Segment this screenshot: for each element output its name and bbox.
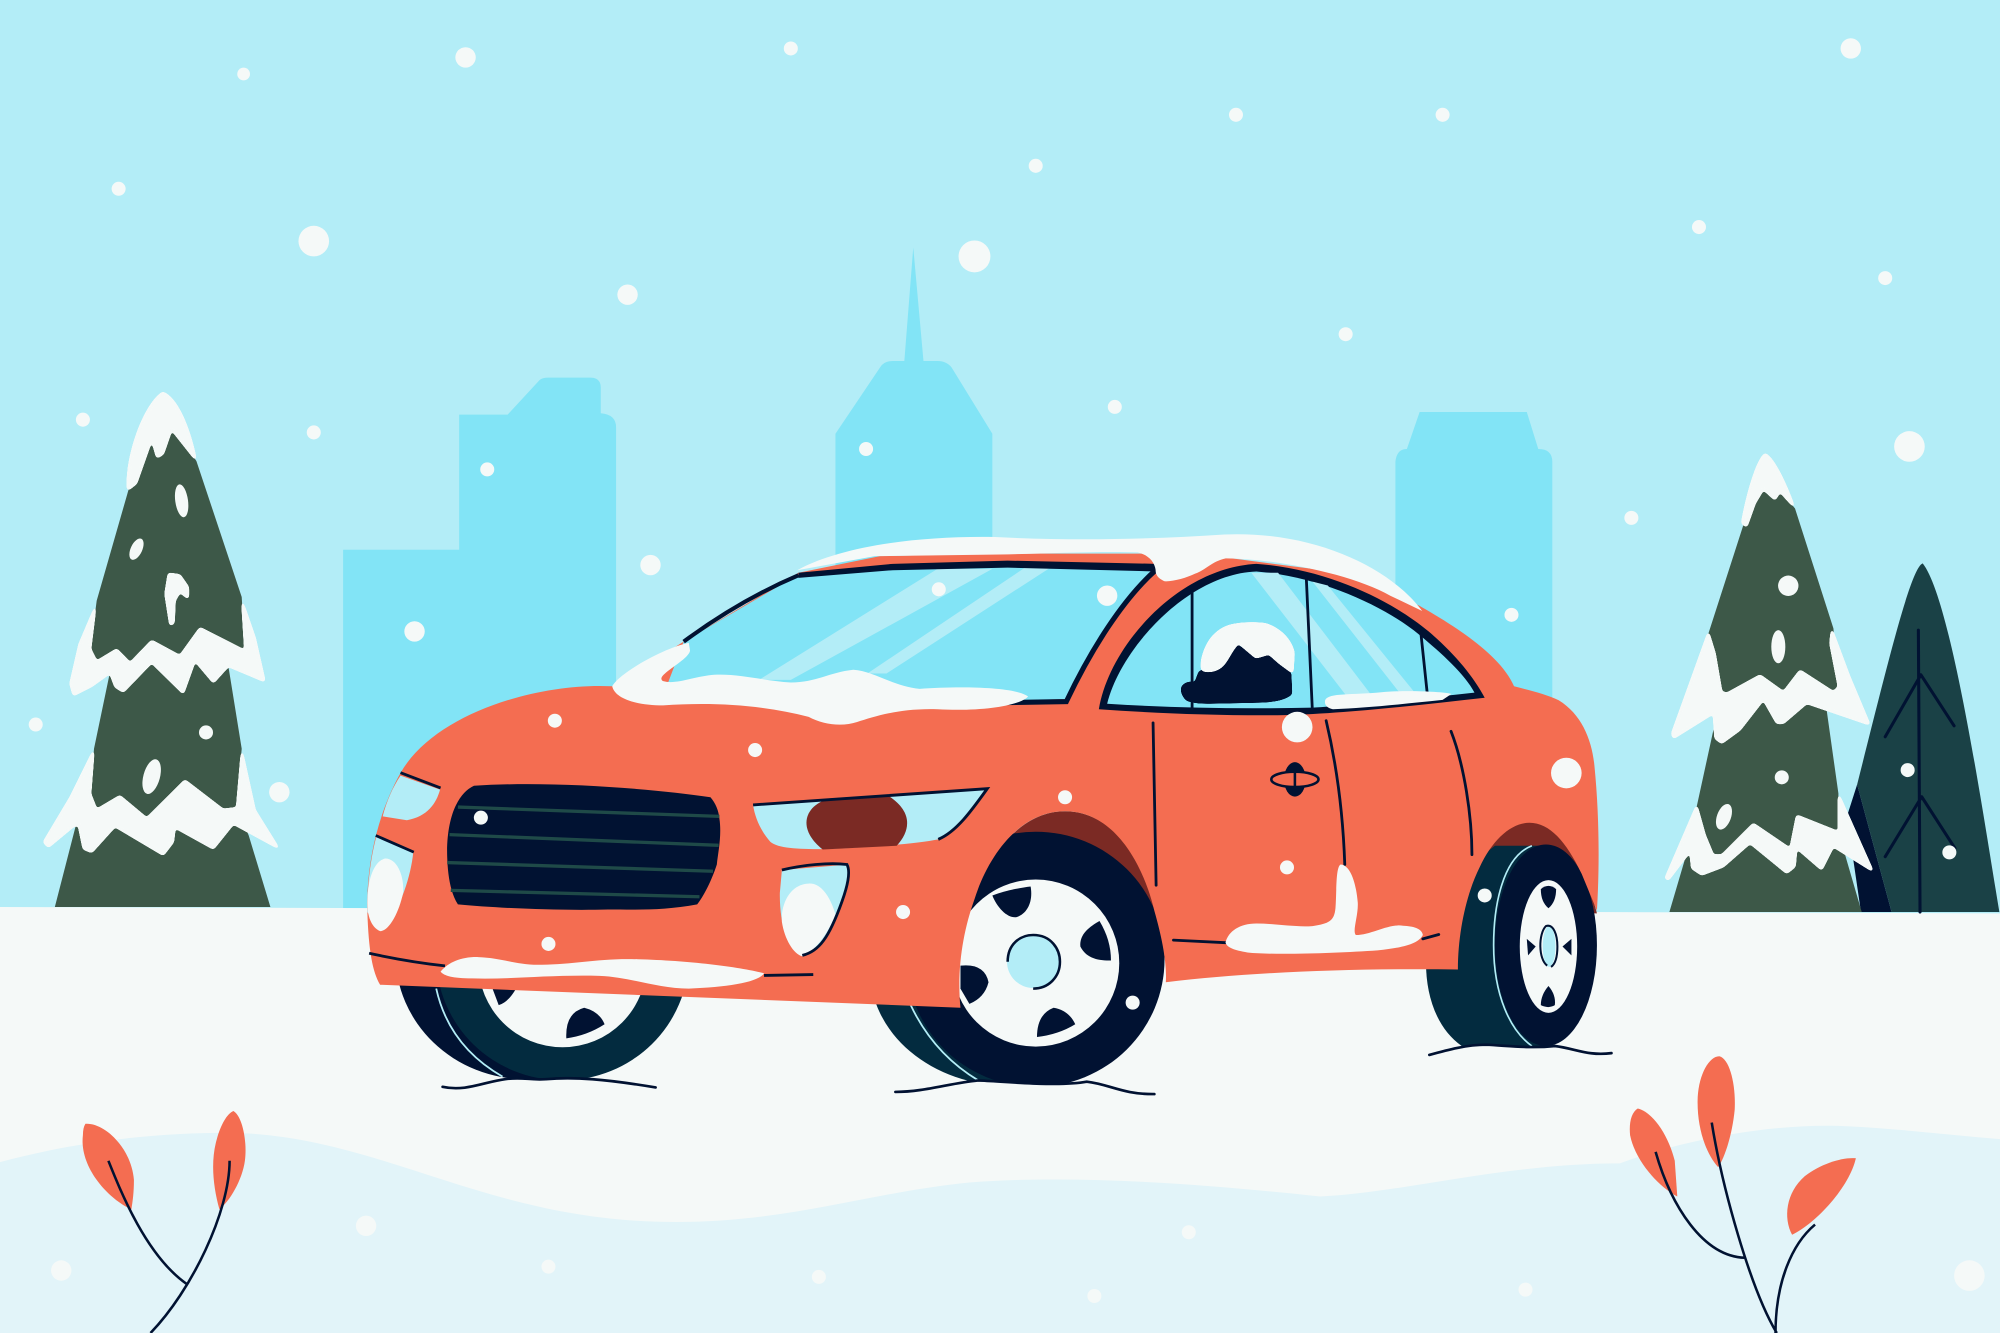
bumper crease: [369, 953, 813, 975]
rim: [478, 879, 647, 1047]
spokes: [960, 887, 1111, 1037]
sill snow: [1226, 864, 1423, 954]
hood snow: [612, 643, 1028, 725]
spoke: [566, 1008, 605, 1038]
door lines: [1153, 721, 1472, 943]
glass: [1107, 571, 1474, 708]
car body: [367, 554, 1599, 1008]
tyre side: [436, 833, 689, 1080]
front right wheel: [870, 811, 1165, 1087]
rear tyre highlight: [1494, 846, 1532, 1046]
inner lamp: [806, 795, 907, 850]
rear hub: [1543, 926, 1555, 967]
front left mound: [443, 1078, 654, 1112]
lens: [780, 864, 849, 956]
leaf: [213, 1111, 246, 1209]
tread: [395, 829, 656, 1079]
tree snow: [43, 392, 279, 855]
leaf: [83, 1124, 134, 1209]
ground: snow field: [0, 907, 2000, 1333]
dark pine snow dots: [1901, 763, 1956, 859]
rear tyre face: [1495, 844, 1597, 1046]
rear hub outline and spokes: [1527, 886, 1571, 1007]
tree body: [55, 408, 270, 907]
city skyline silhouettes: [343, 247, 1552, 931]
mirror snow: [1202, 623, 1294, 673]
left side lamps: [367, 773, 441, 931]
grille slats: [447, 807, 719, 897]
snow in lens: [782, 884, 835, 956]
bumper snow: [441, 957, 764, 989]
grille: [447, 784, 720, 910]
tread: [870, 853, 1145, 1086]
dark pine body: [1857, 563, 1999, 912]
lower lamp: [367, 837, 413, 931]
tree snow blobs: [126, 483, 213, 796]
hub: [1007, 936, 1059, 988]
tyre highlight: [436, 989, 503, 1077]
building: right: [1395, 412, 1552, 765]
rear arch shadow: [1480, 821, 1597, 913]
frame right pillar: [989, 570, 1156, 703]
side window: [1099, 564, 1485, 715]
building: centre tower with spire: [835, 247, 992, 765]
spoke: [491, 985, 515, 1005]
tree: dark pine on the right: [1847, 563, 1999, 912]
lens: [753, 789, 987, 849]
tree snow blobs: [1713, 576, 1798, 832]
grille panel: [447, 784, 720, 910]
tree: left snowy pine: [43, 392, 279, 907]
rim: [952, 880, 1119, 1047]
leaf: [1787, 1158, 1856, 1235]
reflections: [1251, 573, 1416, 696]
windshield: [663, 561, 1156, 705]
reflections: [759, 566, 1052, 680]
rear mound: [1429, 1045, 1611, 1072]
glass: [663, 564, 1156, 705]
car: [367, 534, 1611, 1116]
front right mound: [895, 1080, 1154, 1116]
tree: right snowy pine: [1665, 453, 1873, 912]
frame A pillar: [684, 575, 798, 642]
building: left: [343, 378, 616, 931]
plant: right foreground: [1630, 1056, 1856, 1333]
mound outlines: [443, 1045, 1611, 1094]
window frame: [1099, 564, 1485, 715]
pillars: [1192, 574, 1427, 708]
hub outline: [1008, 935, 1060, 989]
leaf: [1698, 1056, 1735, 1167]
stems: [1656, 1123, 1815, 1333]
rear tyre tread: [1426, 846, 1546, 1046]
lamp snow: [367, 858, 403, 931]
snow mounds at tyres: [443, 1045, 1611, 1116]
rear wheel: [1426, 821, 1597, 1046]
rear rim: [1520, 880, 1577, 1013]
upper lamp: [383, 776, 440, 820]
tyre highlight: [911, 1005, 978, 1080]
wheel arch shadow: [976, 811, 1158, 944]
leaf: [1630, 1108, 1677, 1197]
ground: foreground snow drift: [0, 1126, 2000, 1333]
fog light: [780, 864, 849, 956]
tyre side: [907, 832, 1165, 1087]
frame top band: [798, 561, 1156, 578]
tree snow: [1665, 453, 1873, 880]
side mirror: [1182, 644, 1291, 703]
outline: [753, 789, 987, 839]
headlight: [753, 789, 987, 850]
door handle: [1271, 762, 1318, 797]
front left wheel: [395, 829, 689, 1080]
roof snow: [797, 534, 1422, 611]
lamp strokes: [376, 773, 441, 852]
window sill snow: [1325, 691, 1452, 709]
stems: [108, 1161, 230, 1333]
tree body: [1669, 472, 1862, 912]
dark pine branches: [1885, 630, 1955, 912]
outline: [782, 864, 849, 955]
plant: left foreground: [83, 1111, 246, 1333]
dark pine shadow: [1847, 784, 1892, 912]
